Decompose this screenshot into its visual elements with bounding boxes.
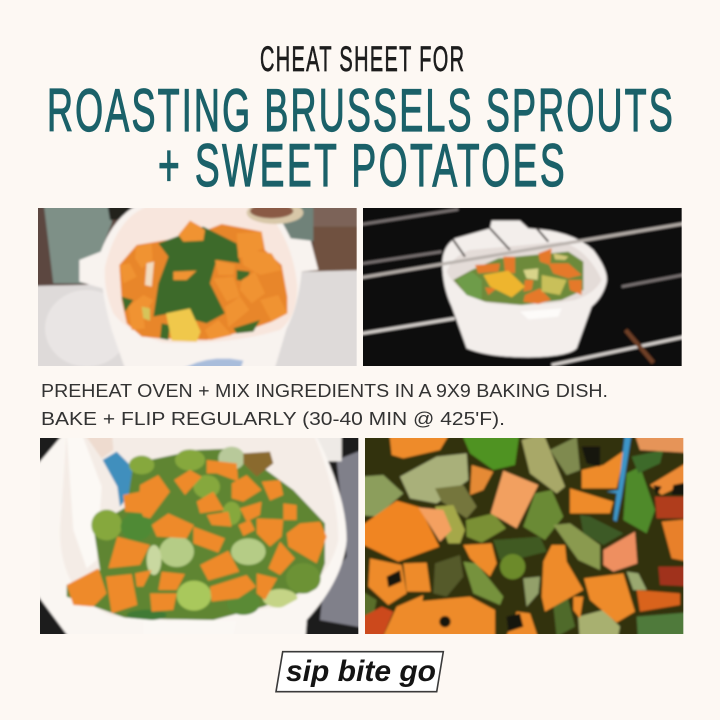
icon: white dish on rack [442, 221, 607, 357]
panel: photo of flipping vegetables in bowl [40, 438, 358, 634]
food: vegetables in dish [453, 248, 583, 305]
food: herbs [153, 227, 240, 323]
icon: blue spatula edge [607, 433, 632, 522]
food: sweet potatoes in dish [120, 221, 287, 340]
food: sweet potato cubes [67, 460, 327, 613]
grey cloth [318, 450, 358, 629]
icon: white baking dish [79, 203, 318, 373]
instructions text: BAKE + FLIP REGULARLY (30-40 MIN @ 425'F). [41, 409, 505, 429]
food: roasted sweet potatoes [365, 438, 684, 634]
panel: photo of roasted vegetables close-up [365, 438, 684, 634]
food: base of sweet potatoes [119, 221, 287, 340]
food: butter [166, 308, 201, 342]
heading: cheat sheet for: CHEAT SHEET FOR [260, 40, 464, 80]
instructions text: PREHEAT OVEN + MIX INGREDIENTS IN A 9X9 BAKING DISH. [41, 381, 608, 401]
charred spots [387, 447, 697, 632]
back oven rack rails [355, 209, 692, 287]
instructions text [41, 381, 608, 429]
title [47, 78, 673, 199]
food: roasted brussels sprouts [365, 438, 684, 634]
title: + SWEET POTATOES [158, 132, 565, 199]
panel: photo of dish on oven rack [363, 208, 682, 366]
panel: photo of ingredients in baking dish [38, 208, 357, 366]
food: base of vegetables [67, 448, 325, 620]
bowl front rim [30, 585, 73, 643]
icon: spatula handle and blue head [87, 438, 114, 458]
logo: sip bite go: sip bite go [286, 655, 436, 688]
title: ROASTING BRUSSELS SPROUTS [47, 78, 673, 144]
icon: white bowl [40, 438, 348, 634]
front oven rack rails [355, 222, 692, 365]
icon: jar at top of dish [246, 208, 305, 225]
food: brussels sprouts [91, 447, 321, 620]
icon: blue dish pattern [186, 358, 244, 366]
